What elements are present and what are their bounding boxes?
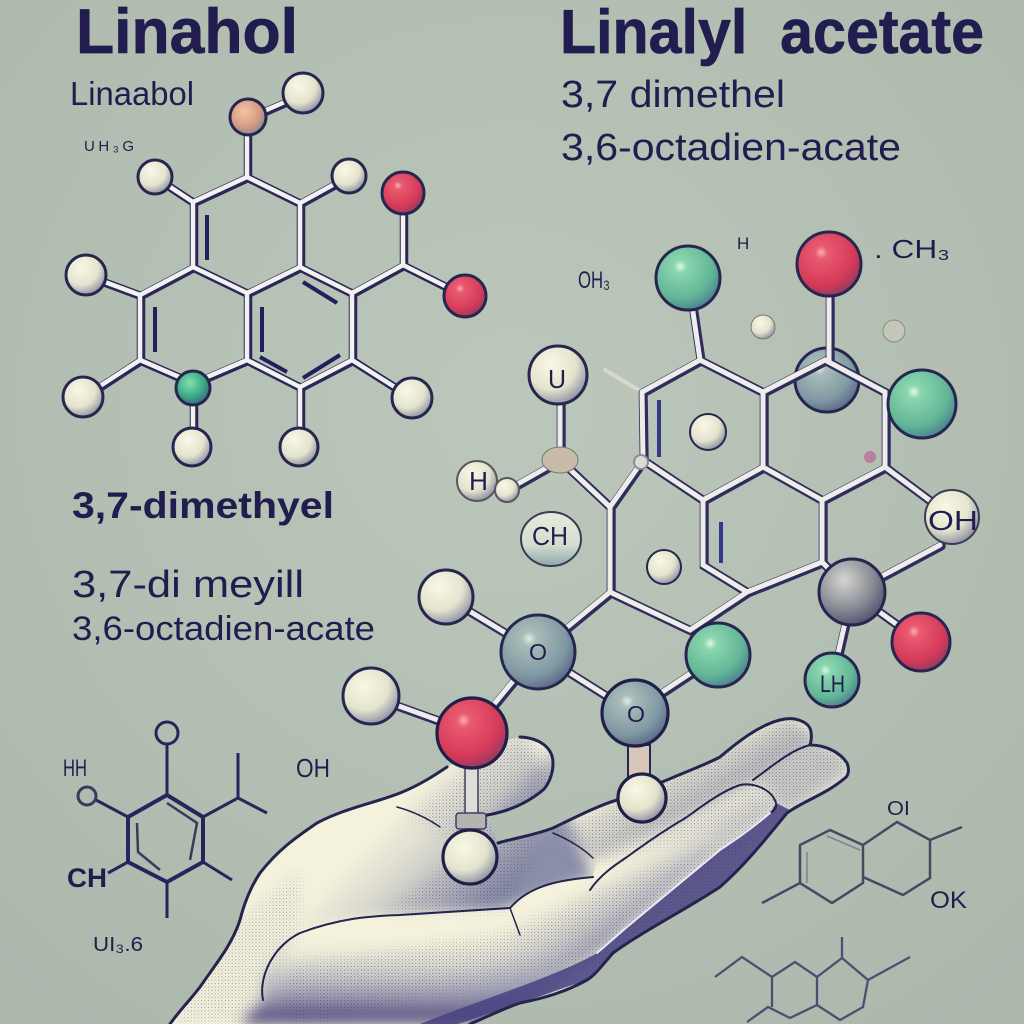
small structure: bottom left: HH bbox=[63, 755, 87, 782]
hand bbox=[168, 717, 850, 1024]
hand shading bbox=[174, 720, 847, 1024]
small label: left molecule: UH₃G bbox=[84, 138, 134, 155]
atom labels: right molecule: CH bbox=[532, 521, 568, 551]
atoms on the palm bbox=[437, 680, 668, 884]
atom labels: right molecule: H bbox=[737, 234, 749, 253]
atom: gray behind ring bbox=[795, 348, 859, 412]
atom labels: right molecule: OH bbox=[928, 505, 978, 536]
small structure: bottom right: OK bbox=[930, 887, 967, 914]
atom label: O: O bbox=[627, 701, 645, 727]
molecule: linalool bbox=[63, 73, 486, 466]
atom labels: right molecule: . CH₃ bbox=[874, 234, 950, 264]
hand silhouette bbox=[170, 719, 848, 1024]
atom labels: right molecule: LH bbox=[820, 671, 845, 698]
text: 3,7-di meyill: 3,7-di meyill bbox=[72, 564, 304, 606]
bond: red atom to white atom bbox=[456, 760, 486, 829]
atoms: right molecule bbox=[343, 232, 979, 724]
small structure: bottom left bbox=[63, 722, 330, 956]
molecule: linalyl acetate bbox=[343, 232, 979, 733]
subtitle: chemical name line 2: 3,6-octadien-acate bbox=[561, 127, 901, 169]
atom labels: right molecule: H bbox=[469, 466, 488, 496]
text: 3,7-dimethyel: 3,7-dimethyel bbox=[72, 485, 334, 526]
atom labels: right molecule: O bbox=[529, 639, 547, 665]
small structure: bottom left: CH bbox=[67, 863, 107, 893]
bond: gray atom to white atom bbox=[628, 745, 650, 777]
small structure: bottom right: OI bbox=[887, 798, 910, 820]
small structure: bottom left: OH bbox=[296, 753, 330, 783]
title: Linalyl acetate: Linalyl acetate bbox=[560, 0, 984, 67]
atom labels: right molecule: U bbox=[548, 364, 566, 394]
bonds: left molecule bbox=[83, 94, 466, 448]
atom labels: right molecule: OH₃ bbox=[578, 267, 610, 294]
bonds: right molecule bbox=[371, 264, 953, 733]
atoms held over hand bbox=[437, 680, 668, 884]
atom labels: right molecule bbox=[469, 234, 978, 698]
subtitle: left molecule name: Linaabol bbox=[70, 75, 194, 112]
text: 3,6-octadien-acate: 3,6-octadien-acate bbox=[72, 610, 375, 648]
small structure: bottom right bbox=[715, 798, 967, 1022]
subtitle: chemical name line 1: 3,7 dimethel bbox=[561, 74, 785, 116]
atoms: left molecule bbox=[63, 73, 486, 466]
small structure: bottom left: UI₃.6 bbox=[93, 934, 143, 956]
hand outline and creases bbox=[170, 719, 848, 1024]
